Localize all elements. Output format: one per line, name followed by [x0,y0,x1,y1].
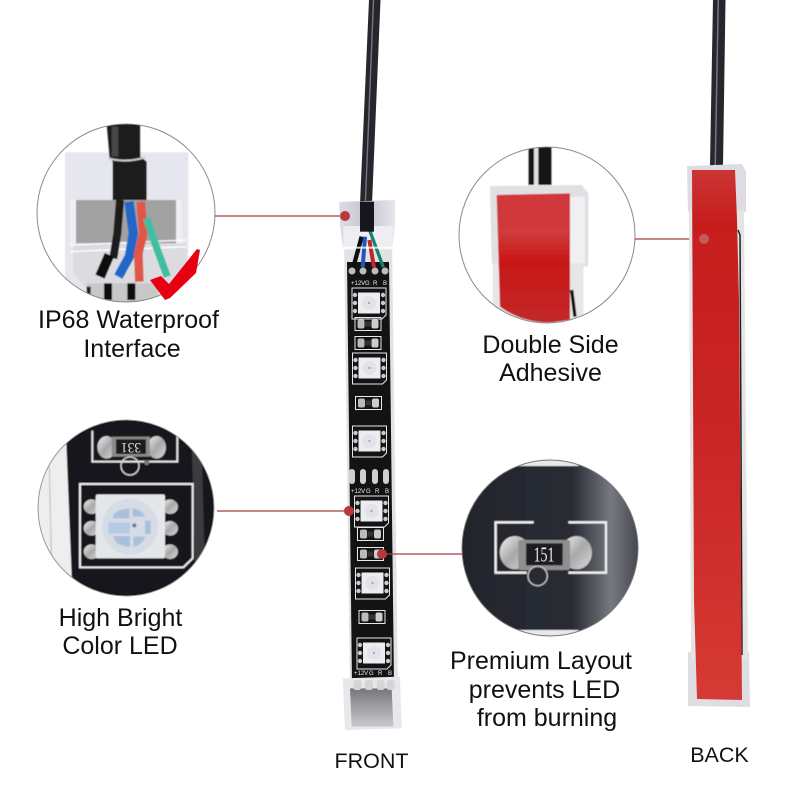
strip: top solder pads [348,268,388,274]
strip: top pad labels: +12V [351,281,365,287]
wire: back cable [710,0,726,166]
front LED strip [339,0,402,730]
strip: middle pad labels: B [385,489,389,495]
strip: top pad labels: G [365,281,370,287]
resistor code 151: 151 [534,543,554,566]
icon: red check mark [150,249,200,300]
strip: top cap with wires [339,200,395,267]
heading: Double Side Adhesive: Double Side [482,331,619,359]
callout line: waterproof interface [215,215,345,217]
marker dot: layout [377,549,387,559]
strip: bottom pad labels: G [369,671,374,677]
strip: clear sleeve [344,240,398,690]
circle: waterproof interface close-up [36,124,216,302]
callout line: premium layout [382,553,462,555]
strip: black PCB [347,262,394,684]
strip: resistors [355,318,385,624]
marker dot: LED [344,506,354,516]
heading: Premium Layout text: prevents LED [469,676,620,704]
strip: top pad labels: R [373,281,378,287]
strip: bottom pad labels: R [378,671,383,677]
strip: top pad labels: B [383,281,387,287]
strip: middle pad labels: G [366,489,371,495]
strip: middle pad labels: +12V [351,489,365,495]
label: BACK: BACK [690,743,749,767]
strip: dark edge [738,230,742,655]
resistor code 331: 331 [121,439,141,456]
heading: High Bright Color LED: Color LED [62,632,178,660]
strip: red adhesive tape [692,170,742,700]
strip: bottom cap [688,652,750,707]
circle: double side adhesive close-up [458,146,636,324]
circle: high bright LED close-up [38,420,214,596]
marker dot: interface [340,211,350,221]
strip: side edge [689,210,748,660]
marker dot: adhesive [699,234,709,244]
circle: premium layout close-up [462,460,638,636]
heading: IP68 Waterproof Interface: IP68 Waterproof [38,306,219,334]
strip: LEDs [352,288,391,669]
heading: Premium Layout text: Premium Layout [450,647,632,675]
strip: bottom pad labels: +12V [354,671,368,677]
wire: front cable [360,0,380,204]
heading: Premium Layout text: from burning [477,704,617,732]
heading: Double Side Adhesive: Adhesive [499,359,602,387]
heading: High Bright Color LED: High Bright [59,604,182,632]
strip: middle pad labels: R [375,489,380,495]
strip: middle solder pads [349,469,389,484]
callout line: adhesive [635,238,704,240]
strip: top cap [687,164,746,212]
label: FRONT: FRONT [334,749,409,773]
back LED strip [687,0,750,707]
strip: bottom cap [343,677,402,730]
heading: IP68 Waterproof Interface: Interface [83,335,181,363]
callout line: high bright LED [217,510,349,512]
strip: bottom pad labels: B [388,671,392,677]
